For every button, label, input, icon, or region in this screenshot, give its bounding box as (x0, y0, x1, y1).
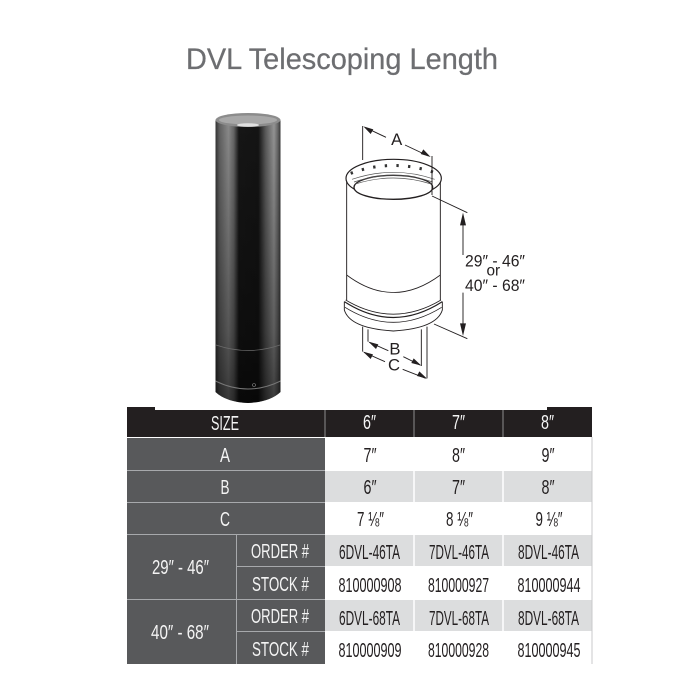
dimension height: 29″ - 46″ (465, 252, 525, 271)
value cells: 810000927 (428, 575, 489, 597)
dimension A (363, 126, 432, 195)
row label cells: C (220, 509, 230, 531)
table header: 6″ (363, 412, 376, 434)
value cells: 8″ (452, 445, 465, 467)
value cells: 8DVL-46TA (518, 542, 579, 564)
row label cells: 40″ - 68″ (151, 622, 209, 644)
value cells: 810000928 (428, 640, 489, 662)
value cells: 7″ (452, 477, 465, 499)
pipe outline (344, 159, 442, 331)
table header: SIZE (211, 413, 239, 435)
dimension height (432, 196, 525, 339)
value cells: 8 ⅛″ (446, 509, 473, 531)
row label cells (127, 438, 325, 664)
value cells: 810000944 (518, 575, 580, 597)
dimension height: 40″ - 68″ (465, 276, 525, 295)
value cells: 810000909 (338, 640, 402, 662)
value cells: 810000945 (518, 640, 580, 662)
diagram: pipe line drawing with dimensions (344, 126, 525, 379)
table header: 8″ (541, 412, 554, 434)
table: sizes and part numbers (127, 407, 592, 664)
dimension height: or (487, 263, 500, 280)
photo: black telescoping pipe (216, 113, 280, 403)
row label cells: ORDER # (251, 606, 310, 628)
value cells: 9″ (542, 445, 554, 467)
row label cells: ORDER # (251, 541, 310, 563)
row label cells: 29″ - 46″ (152, 557, 209, 579)
value cells: 7DVL-46TA (429, 542, 489, 564)
row label cells: A (220, 445, 230, 467)
table header (127, 407, 592, 437)
table header: 7″ (452, 412, 465, 434)
dimension A: A (391, 130, 403, 149)
value cells: 7″ (364, 445, 376, 467)
value cells: 9 ⅛″ (536, 509, 562, 531)
value cells: 6DVL-46TA (339, 542, 400, 564)
value cells (325, 437, 592, 664)
value cells: 7DVL-68TA (429, 608, 489, 630)
title: DVL Telescoping Length (186, 43, 498, 76)
dimensions B and C (363, 327, 427, 379)
value cells: 6DVL-68TA (339, 608, 400, 630)
value cells: 8DVL-68TA (518, 608, 579, 630)
row label cells: B (220, 477, 230, 499)
value cells: 7 ⅛″ (357, 509, 384, 531)
value cells: 810000908 (338, 575, 402, 597)
row label cells: STOCK # (252, 574, 310, 596)
dimensions B and C: C (388, 355, 400, 374)
dimensions B and C: B (389, 339, 401, 358)
value cells: 6″ (364, 477, 376, 499)
value cells: 8″ (542, 477, 554, 499)
row label cells: STOCK # (252, 639, 310, 661)
